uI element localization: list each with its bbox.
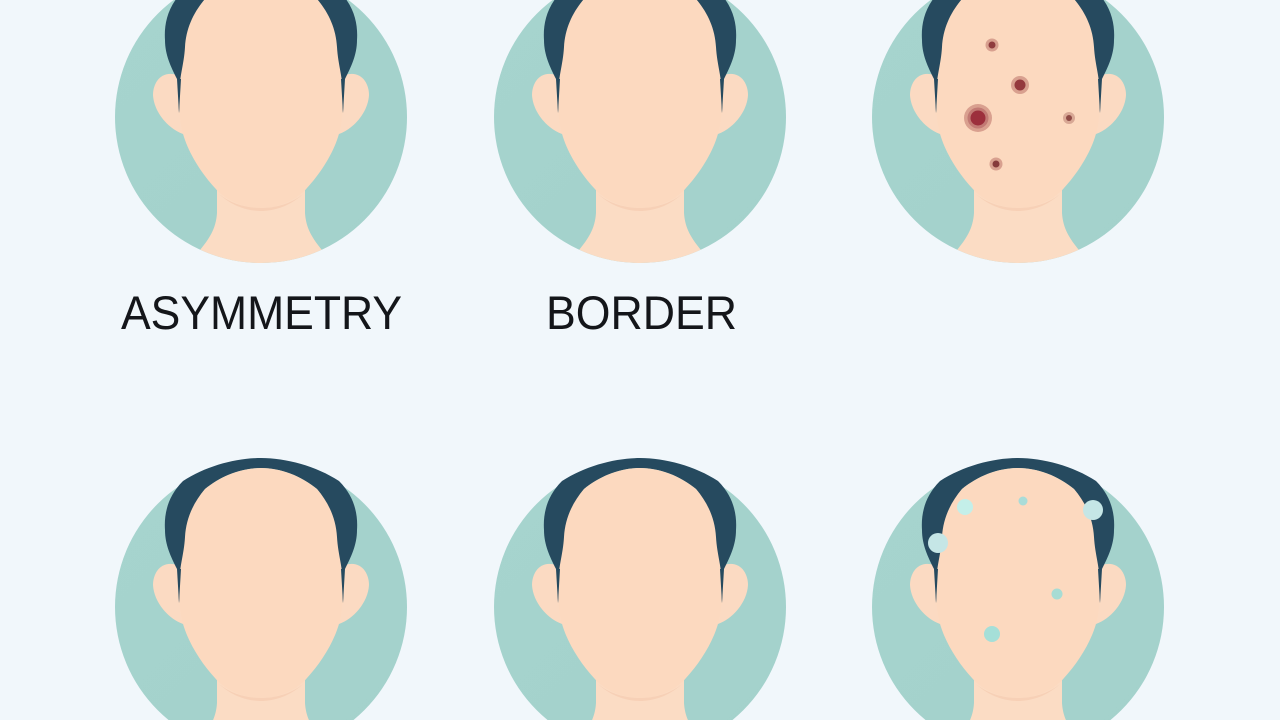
panel: lower middle face [494, 458, 786, 720]
icon: spot cheek [1052, 588, 1062, 600]
icon: large lesion [964, 104, 992, 132]
icon: spot upper left [957, 499, 973, 515]
icon: small lesion cheek [1063, 112, 1075, 124]
icon: small lesion chin [990, 158, 1002, 170]
icon: spot left [928, 533, 948, 553]
panel: border face [494, 0, 786, 267]
panel: face with pale spots [872, 458, 1164, 720]
panel: face with dark lesions [872, 0, 1164, 267]
panel: asymmetry face [115, 0, 407, 267]
heading: asymmetry: ASYMMETRY [121, 286, 402, 339]
icon: spot lower [984, 626, 1000, 642]
icon: medium lesion [1011, 76, 1029, 94]
icon: small lesion forehead [986, 38, 998, 52]
icon: spot top [1018, 496, 1028, 506]
icon: spot upper right [1083, 500, 1103, 520]
heading: border: BORDER [546, 286, 737, 339]
panel: lower left face [115, 458, 407, 720]
